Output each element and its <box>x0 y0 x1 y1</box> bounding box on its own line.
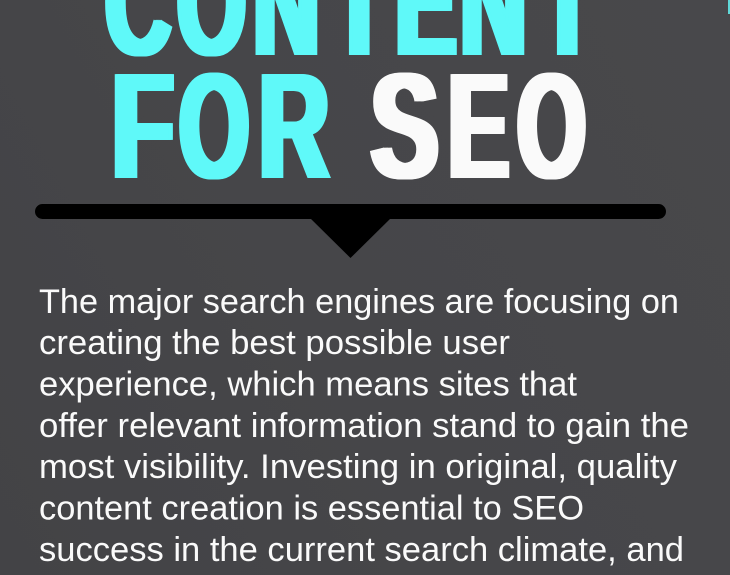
body paragraph: success in the current search climate, and <box>39 531 684 569</box>
body paragraph: experience, which means sites that <box>39 366 577 404</box>
body paragraph: The major search engines are focusing on <box>39 283 679 321</box>
body paragraph: offer relevant information stand to gain the <box>39 407 689 445</box>
title line: FOR SEO <box>112 41 586 190</box>
title line: CONTENT <box>105 0 596 87</box>
body paragraph: creating the best possible user <box>39 324 510 362</box>
top right edge accent <box>728 0 730 14</box>
body paragraph: most visibility. Investing in original, quality <box>39 448 678 486</box>
title <box>105 0 596 190</box>
body paragraph: content creation is essential to SEO <box>39 490 584 528</box>
